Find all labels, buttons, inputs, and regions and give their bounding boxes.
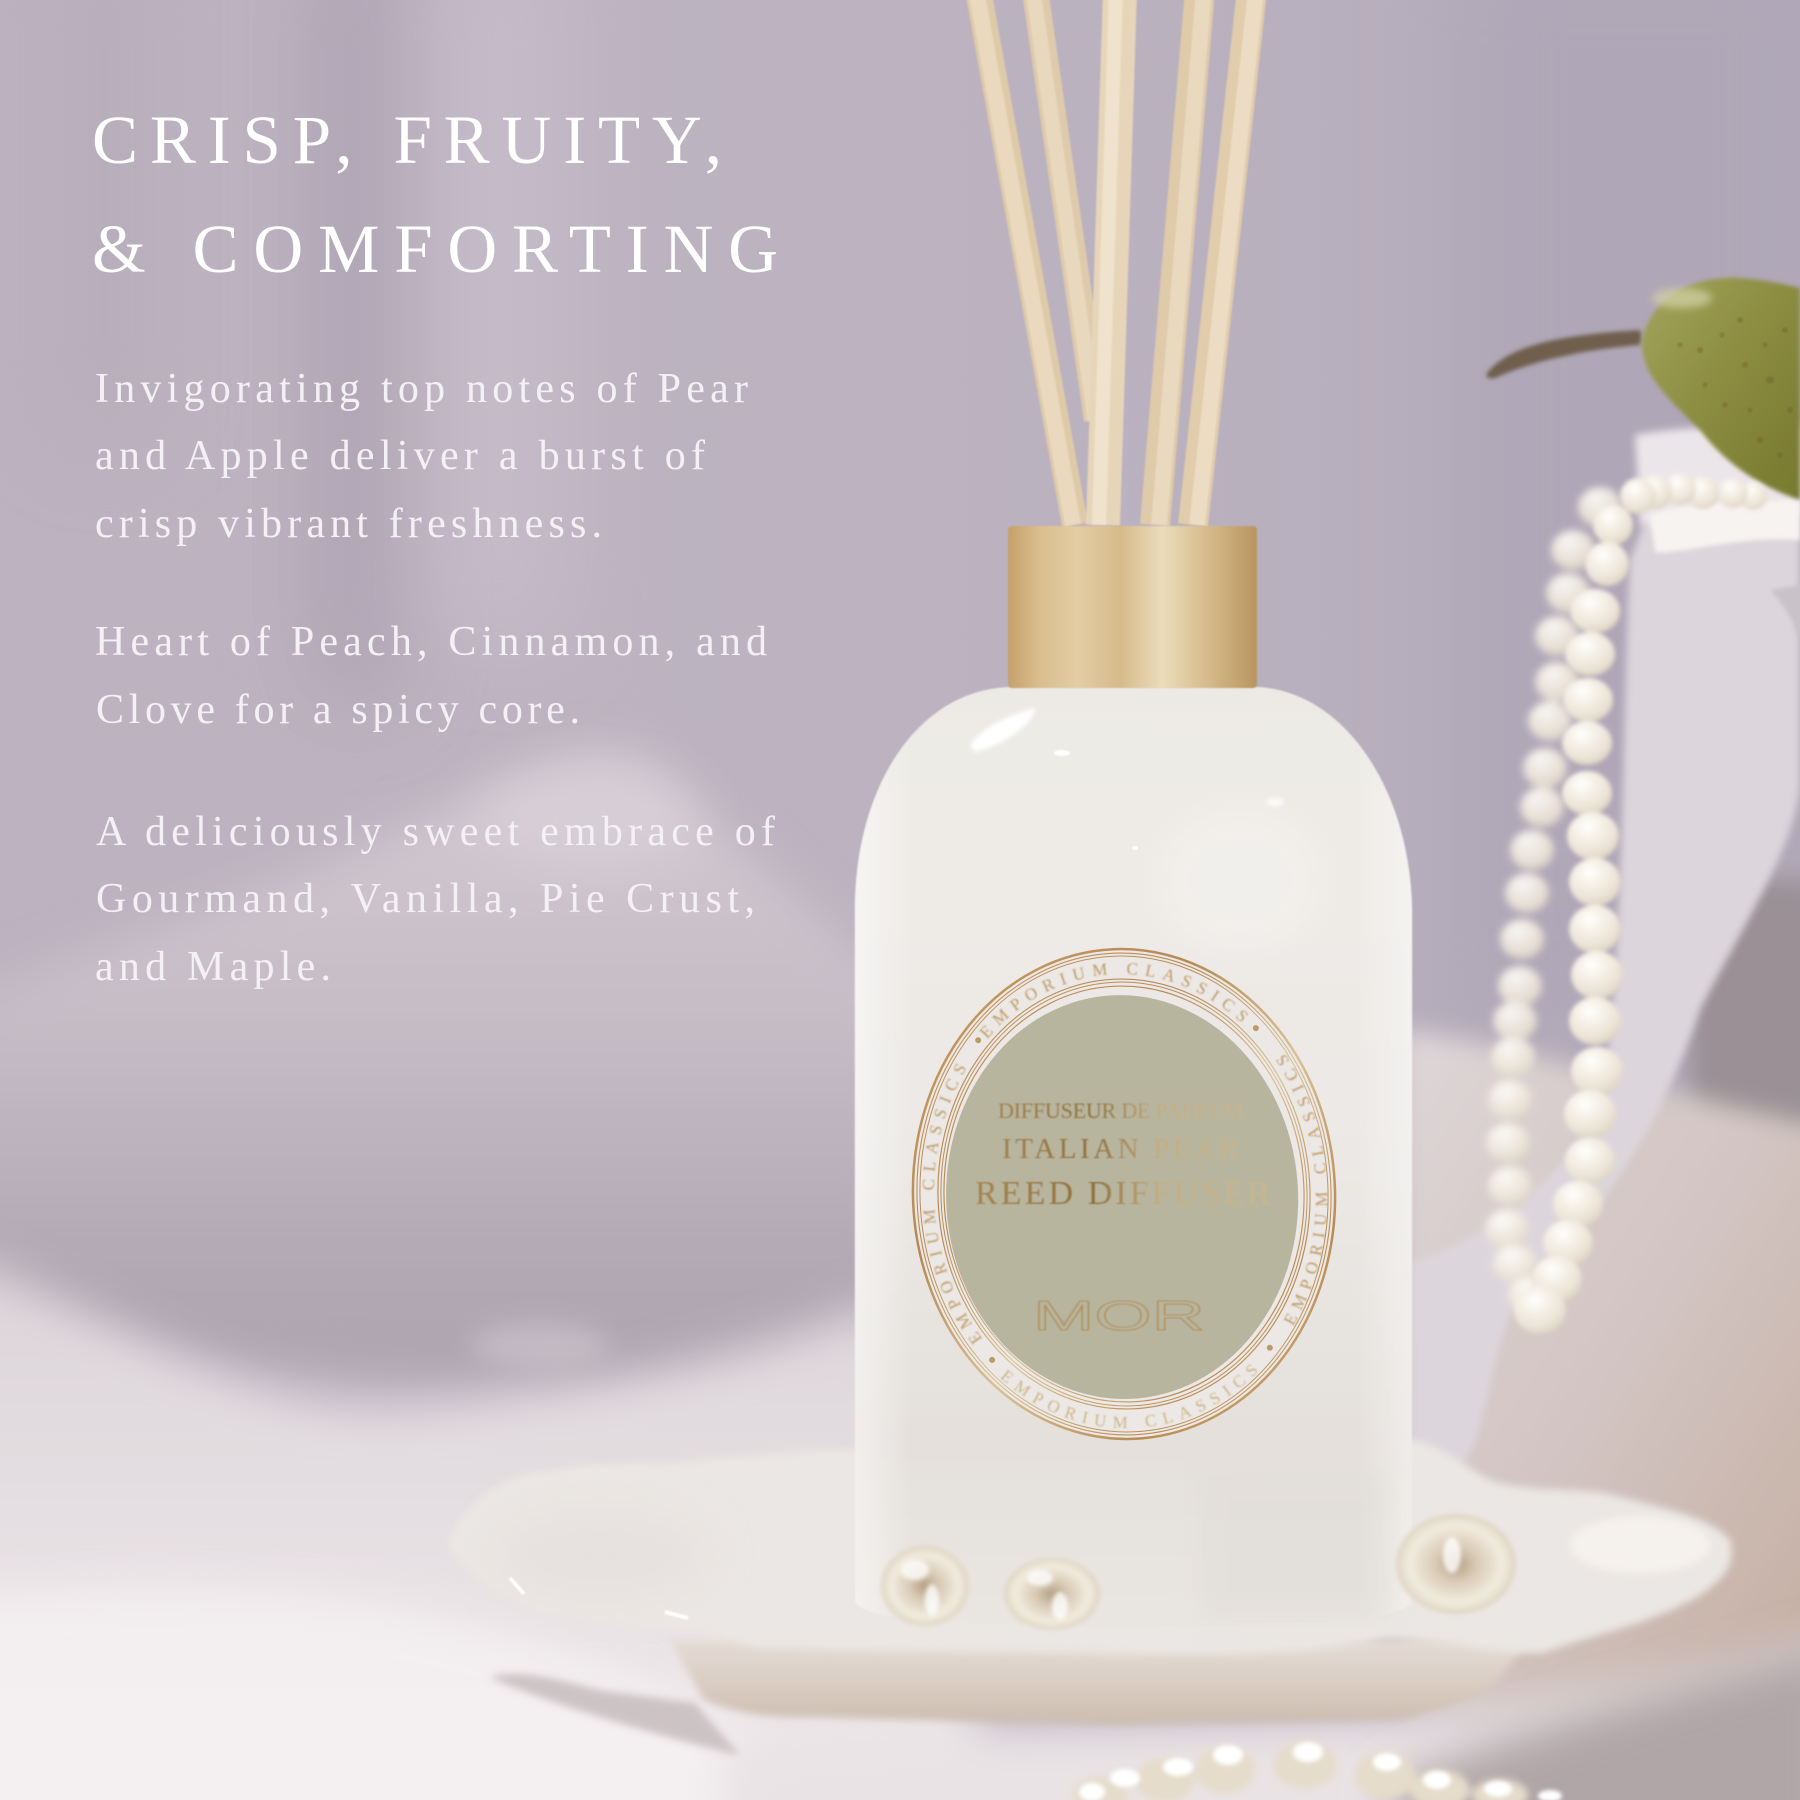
ring lettering: EMPORIUM CLASSICS bbox=[1000, 1364, 1258, 1429]
paragraph: heart notes bbox=[95, 619, 767, 733]
pear with stem bbox=[1486, 278, 1800, 500]
background: soft light fold behind text bbox=[0, 752, 900, 1420]
pearl necklace draped over jug bbox=[1485, 473, 1767, 1334]
label centre bbox=[937, 988, 1307, 1407]
paragraph: heart notes: Heart of Peach, Cinnamon, and bbox=[95, 619, 767, 665]
saucer lip bbox=[449, 1440, 1732, 1654]
label wording: DIFFUSEUR DE PARFUM bbox=[998, 1098, 1243, 1123]
ring lettering: EMPORIUM CLASSICS bbox=[1276, 1054, 1328, 1326]
pearls on saucer bbox=[881, 1514, 1516, 1630]
label wording bbox=[975, 1098, 1270, 1339]
title: CRISP, FRUITY, bbox=[92, 102, 722, 178]
paragraph: base notes bbox=[95, 809, 775, 990]
label wording: ITALIAN PEAR bbox=[1002, 1133, 1239, 1165]
label wording: REED DIFFUSER bbox=[975, 1175, 1270, 1212]
saucer underside bbox=[670, 1640, 1530, 1725]
ring lettering: EMPORIUM CLASSICS bbox=[978, 962, 1249, 1040]
paragraph: base notes: Gourmand, Vanilla, Pie Crust, bbox=[96, 876, 755, 922]
front strand of pearls bbox=[1514, 473, 1767, 1334]
paragraph: top notes: and Apple deliver a burst of bbox=[95, 433, 705, 479]
background: beige cloth at right bbox=[1400, 1030, 1800, 1720]
paragraph: top notes: crisp vibrant freshness. bbox=[95, 501, 602, 547]
paragraph: heart notes: Clove for a spicy core. bbox=[96, 687, 580, 733]
background: pale cloth foreground bbox=[0, 1250, 1000, 1800]
label oval bbox=[903, 940, 1345, 1448]
reed sticks bbox=[976, 0, 1256, 525]
bottle label bbox=[912, 948, 1336, 1440]
saucer shadow bbox=[489, 1674, 740, 1755]
ring lettering: EMPORIUM CLASSICS bbox=[922, 1063, 983, 1346]
saucer bbox=[449, 1440, 1732, 1755]
paragraph: base notes: A deliciously sweet embrace of bbox=[96, 809, 775, 855]
ring lettering bbox=[922, 962, 1328, 1429]
paragraph: top notes bbox=[95, 366, 748, 547]
paragraph: top notes: Invigorating top notes of Pear bbox=[95, 366, 748, 412]
back strand of pearls bbox=[1485, 487, 1622, 1316]
ring bullets bbox=[975, 1025, 1273, 1363]
gold cap bbox=[1008, 526, 1257, 688]
title: & COMFORTING bbox=[92, 211, 778, 287]
blurred pearls in foreground bbox=[1072, 1741, 1562, 1800]
title bbox=[92, 102, 778, 287]
jug with scalloped rim bbox=[1412, 425, 1800, 1500]
label wording: MOR bbox=[1033, 1292, 1205, 1339]
diffuser bottle bbox=[855, 526, 1412, 1626]
paragraph: base notes: and Maple. bbox=[95, 944, 331, 990]
